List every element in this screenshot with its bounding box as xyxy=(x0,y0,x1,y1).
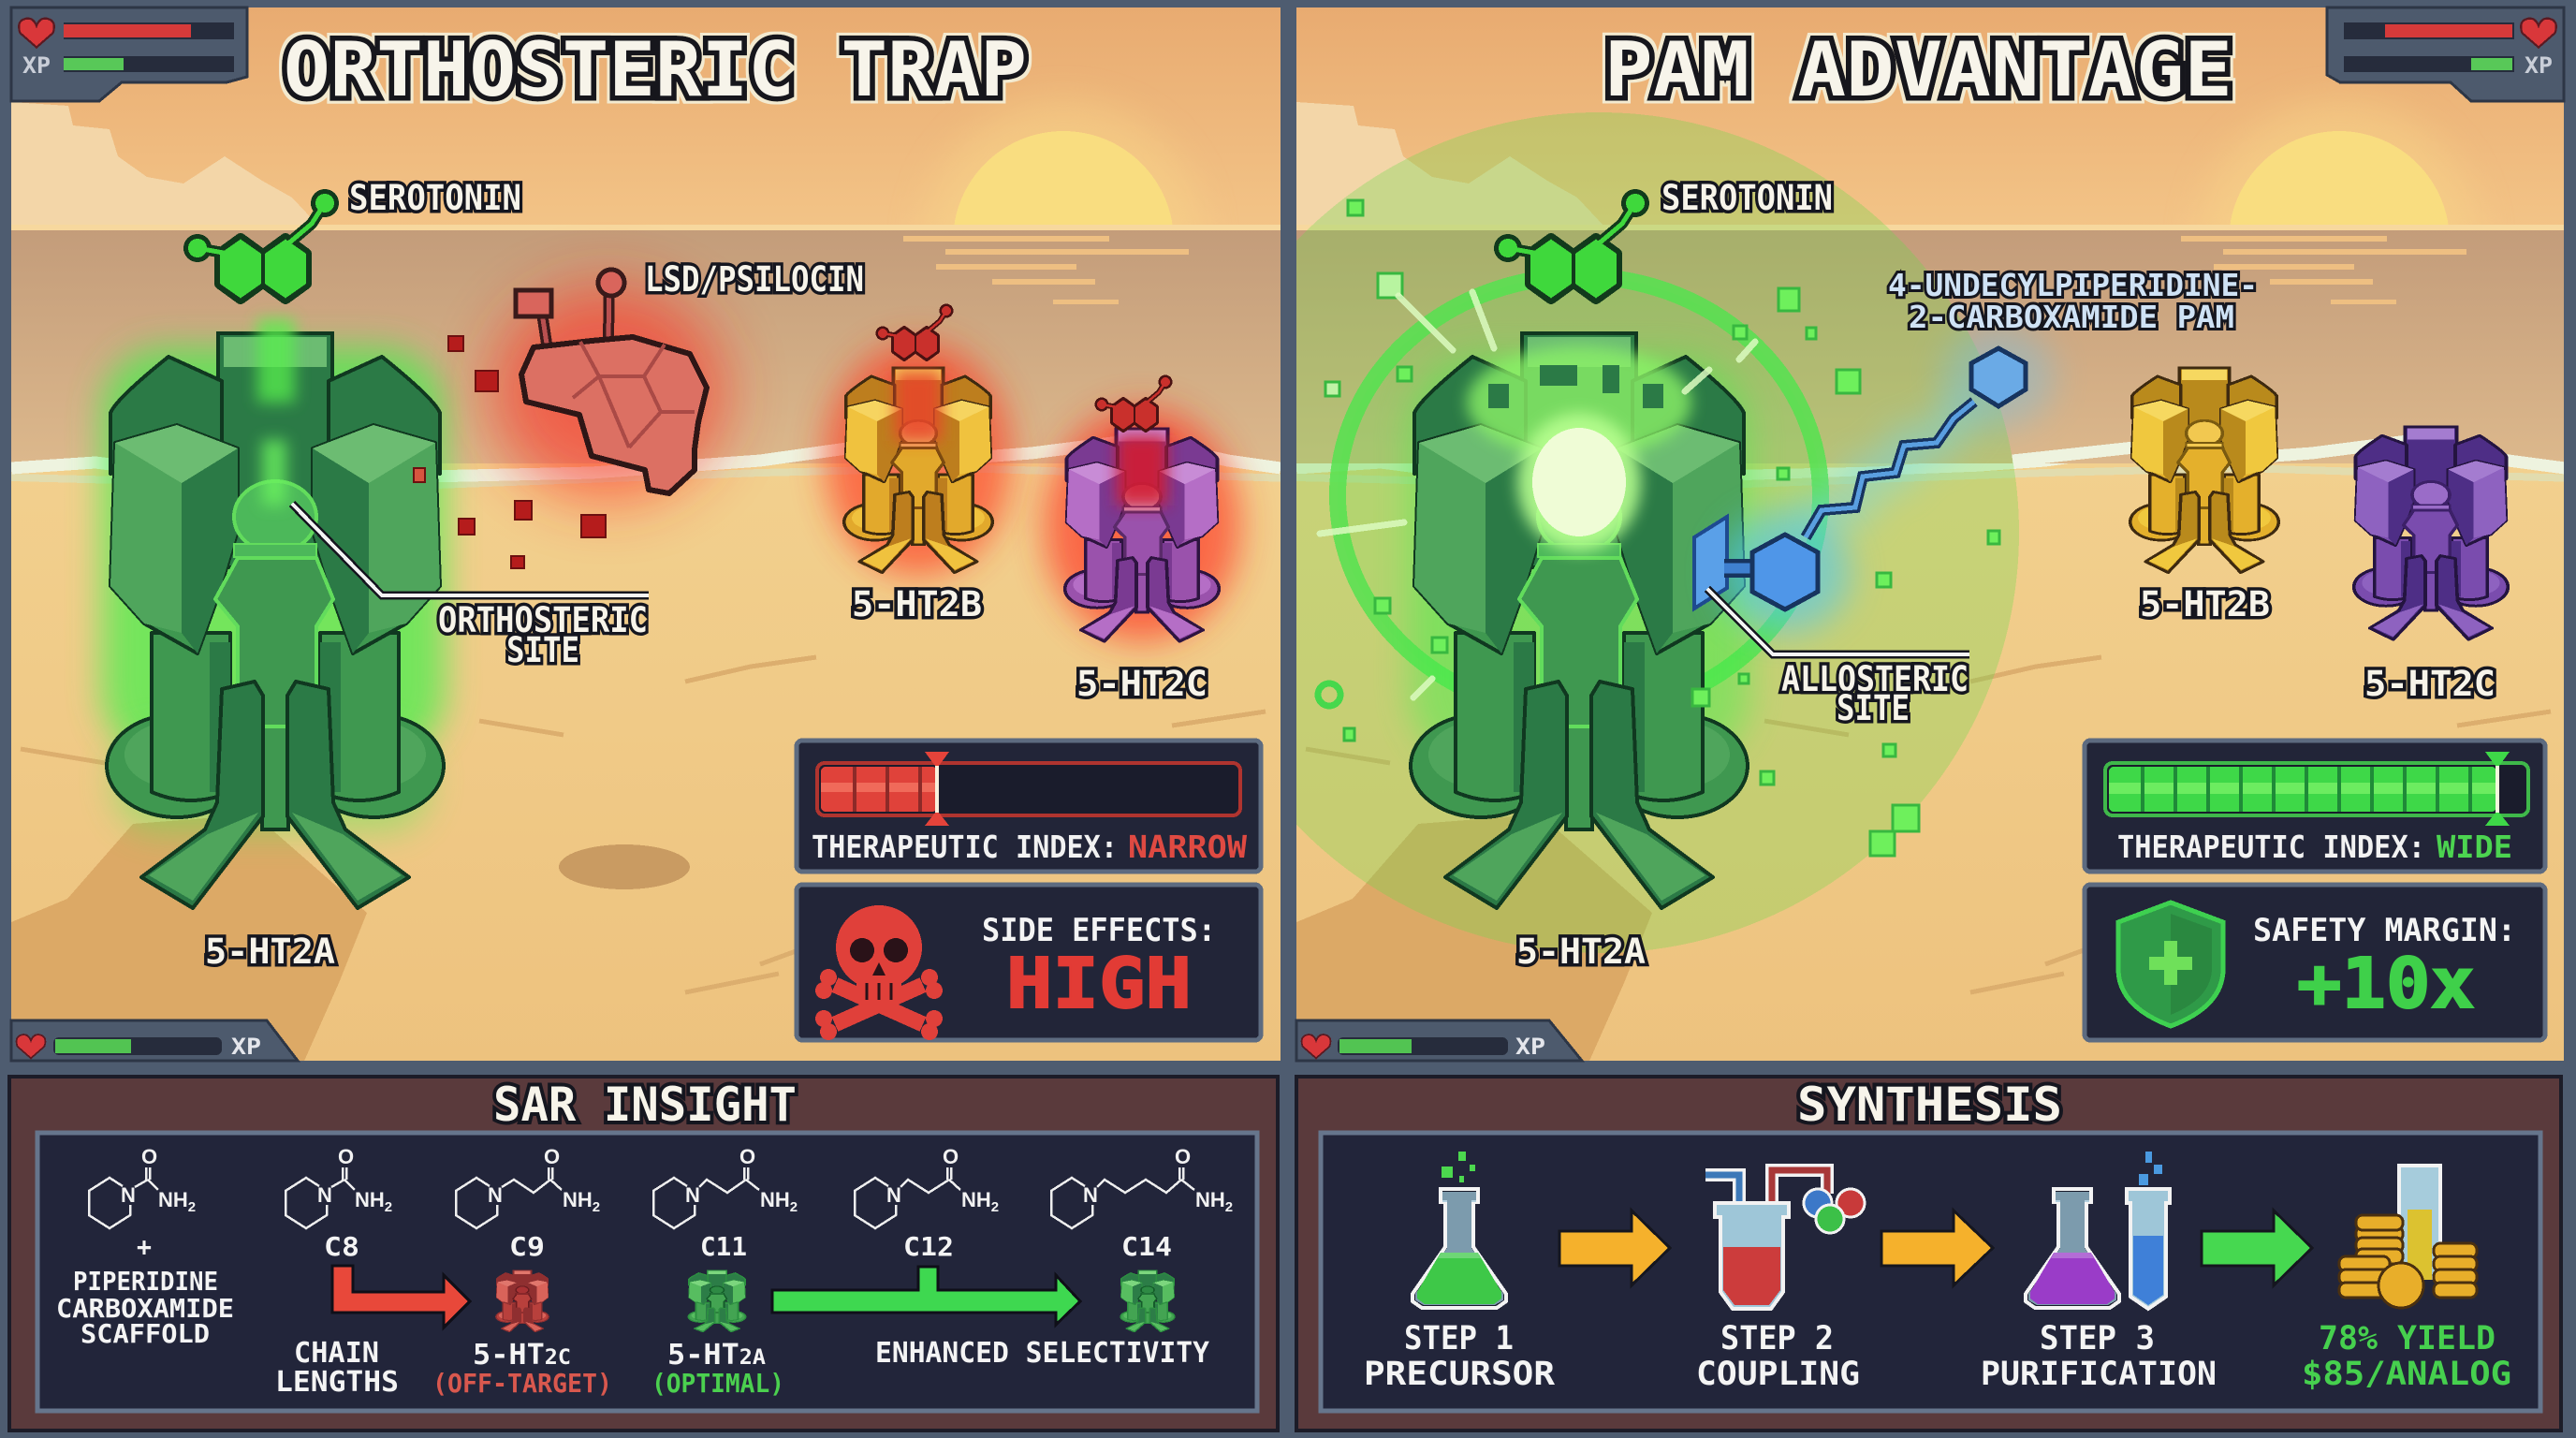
icon: skull and crossbones xyxy=(815,905,943,1040)
chain length labels xyxy=(137,1231,1172,1262)
text: chain lengths: CHAIN xyxy=(294,1337,379,1370)
text: 5-HT2A optimal xyxy=(651,1339,784,1399)
arrow: step 1 to 2 xyxy=(1559,1211,1670,1285)
serotonin label: SEROTONIN xyxy=(1661,178,1833,218)
text: chain lengths xyxy=(275,1337,399,1399)
molecule: C14: O xyxy=(1175,1145,1191,1168)
PAM label xyxy=(1888,267,2258,335)
scene background: beach sunset xyxy=(11,0,1322,1067)
title: PAM advantage: PAM ADVANTAGE xyxy=(1604,26,2232,113)
chain length labels: C9 xyxy=(509,1231,545,1262)
red particles xyxy=(414,336,606,568)
HUD: bottom stats: XP xyxy=(1515,1034,1545,1060)
serotonin molecule xyxy=(1500,195,1644,299)
molecule: C11: O xyxy=(739,1145,755,1168)
callout: allosteric site xyxy=(1707,589,1969,728)
heading: synthesis: SYNTHESIS xyxy=(1797,1078,2062,1132)
molecule: C11: 2 xyxy=(790,1199,798,1215)
HUD: top right stats: XP xyxy=(2525,52,2553,79)
label: 5-HT2C: 5-HT2C xyxy=(2364,664,2496,704)
safety margin box: +10x xyxy=(2297,944,2475,1024)
text: chain lengths: LENGTHS xyxy=(275,1366,399,1399)
safety margin box xyxy=(2085,885,2545,1040)
HUD: top left stats: XP xyxy=(22,52,51,79)
HUD: bottom left stats: XP xyxy=(231,1034,261,1060)
chain length labels: C11 xyxy=(700,1231,747,1262)
molecule: C14: 2 xyxy=(1225,1199,1233,1215)
PAM label: 2-CARBOXAMIDE PAM xyxy=(1909,299,2234,335)
therapeutic index gauge: wide xyxy=(2085,741,2545,872)
callout: orthosteric site: ORTHOSTERIC xyxy=(438,600,648,640)
text: step 2: STEP 2 xyxy=(1720,1320,1834,1357)
label: 5-HT2A: 5-HT2A xyxy=(1516,932,1646,972)
receptor: 5-HT2C purple xyxy=(2354,427,2508,639)
scene background: beach sunset xyxy=(1296,0,2576,1067)
molecule: C9 xyxy=(456,1145,600,1228)
molecule: C12 xyxy=(855,1145,999,1228)
molecule: C14: NH xyxy=(1195,1188,1225,1211)
HUD: top right stats xyxy=(2327,7,2564,101)
text: 5-HT2A optimal: (OPTIMAL) xyxy=(651,1368,784,1399)
molecule: scaffold: O xyxy=(141,1145,157,1168)
HUD: bottom left stats xyxy=(11,1020,298,1061)
text: step 1: STEP 1 xyxy=(1404,1320,1514,1357)
callout: allosteric site: ALLOSTERIC xyxy=(1781,659,1969,699)
molecule: C11: NH xyxy=(760,1188,790,1211)
text: step 2 xyxy=(1696,1320,1860,1393)
molecule: C14: N xyxy=(1083,1183,1098,1207)
title: orthosteric trap: ORTHOSTERIC TRAP xyxy=(284,26,1027,113)
molecule: scaffold xyxy=(89,1145,196,1228)
molecule: C11: N xyxy=(685,1183,700,1207)
molecule: C12: 2 xyxy=(991,1199,999,1215)
icon: yield tube and coins xyxy=(2339,1166,2477,1308)
text: yield and cost: $85/ANALOG xyxy=(2302,1356,2511,1393)
therapeutic index gauge: narrow xyxy=(797,741,1261,872)
panel: PAM advantage xyxy=(1295,6,2565,1062)
molecule: scaffold: NH xyxy=(158,1188,188,1211)
text: step 1 xyxy=(1364,1320,1556,1393)
energy particles xyxy=(1318,200,1999,856)
label: 5-HT2C: 5-HT2C xyxy=(1076,664,1208,704)
side effects box: SIDE EFFECTS: xyxy=(982,912,1216,949)
molecule: scaffold: 2 xyxy=(188,1199,196,1215)
receptor: 5-HT2C purple xyxy=(1044,378,1240,641)
icon: 5-HT2C off-target receptor xyxy=(496,1270,549,1332)
chain length labels: C8 xyxy=(324,1231,359,1262)
molecule: C8: NH xyxy=(355,1188,385,1211)
safety margin box: SAFETY MARGIN: xyxy=(2253,912,2516,949)
text: step 3: STEP 3 xyxy=(2040,1320,2155,1357)
chain length labels: C14 xyxy=(1121,1231,1172,1262)
icon: shield xyxy=(2118,902,2223,1026)
text: enhanced selectivity: ENHANCED SELECTIVITY xyxy=(875,1337,1209,1370)
text: step 3 xyxy=(1981,1320,2217,1393)
serotonin molecule xyxy=(189,195,333,299)
PAM label: 4-UNDECYLPIPERIDINE- xyxy=(1888,267,2258,303)
therapeutic index gauge: narrow: THERAPEUTIC INDEX: xyxy=(812,829,1118,865)
PAM molecule xyxy=(1694,325,2055,633)
icon: 5-HT2A optimal receptor xyxy=(688,1270,746,1332)
callout: allosteric site: SITE xyxy=(1837,688,1910,728)
icon: purification flask and tube xyxy=(2026,1152,2170,1309)
molecule: C8: 2 xyxy=(385,1199,392,1215)
LSD/psilocin molecule xyxy=(491,270,725,501)
label: 5-HT2B: 5-HT2B xyxy=(2140,584,2270,624)
callout: orthosteric site xyxy=(292,504,649,670)
icon: coupling reactor xyxy=(1705,1170,1865,1309)
therapeutic index gauge: wide: THERAPEUTIC INDEX: xyxy=(2117,829,2425,865)
molecule: C8: N xyxy=(317,1183,332,1207)
panel: orthosteric trap xyxy=(11,0,1322,1067)
molecule: C12: O xyxy=(943,1145,959,1168)
energy rays xyxy=(1320,292,1755,697)
therapeutic index gauge: narrow: NARROW xyxy=(1128,829,1247,865)
panel: SAR insight xyxy=(9,1077,1278,1431)
text: step 1: PRECURSOR xyxy=(1364,1356,1556,1393)
molecule: C9: NH xyxy=(563,1188,593,1211)
main receptor: 5-HT2A green with glow xyxy=(101,318,446,908)
label: 5-HT2B: 5-HT2B xyxy=(852,584,982,624)
arrow: step 3 to yield xyxy=(2202,1211,2312,1285)
text: piperidine carboxamide scaffold: PIPERIDINE xyxy=(73,1266,218,1297)
molecule: C14 xyxy=(1051,1145,1233,1228)
receptor: 5-HT2B yellow xyxy=(2130,368,2278,573)
molecule: C9: O xyxy=(544,1145,560,1168)
HUD: top left stats xyxy=(11,7,247,101)
text: yield and cost xyxy=(2302,1320,2511,1393)
molecule: C12: NH xyxy=(961,1188,991,1211)
text: 5-HT2C off-target xyxy=(432,1339,612,1399)
molecule: scaffold: N xyxy=(121,1183,136,1207)
LSD/psilocin label: LSD/PSILOCIN xyxy=(645,259,864,300)
text: yield and cost: 78% YIELD xyxy=(2319,1320,2496,1357)
text: step 3: PURIFICATION xyxy=(1981,1356,2217,1393)
HUD: bottom stats xyxy=(1296,1020,1582,1061)
label: 5-HT2A: 5-HT2A xyxy=(205,932,335,972)
heading: SAR insight: SAR INSIGHT xyxy=(493,1078,797,1132)
serotonin label: SEROTONIN xyxy=(349,178,521,218)
receptor: 5-HT2B yellow xyxy=(825,307,1012,576)
icon: selective receptor xyxy=(1120,1270,1175,1332)
text: 5-HT2C off-target: 5-HT2C xyxy=(473,1339,571,1372)
chain length labels: C12 xyxy=(903,1231,954,1262)
side effects box: HIGH xyxy=(1006,944,1192,1024)
text: step 2: COUPLING xyxy=(1696,1356,1860,1393)
text: piperidine carboxamide scaffold xyxy=(56,1266,234,1349)
chain length labels: + xyxy=(137,1231,152,1262)
arrow: red off-target xyxy=(332,1266,470,1328)
arrow: green enhanced selectivity xyxy=(772,1267,1080,1325)
side effects box xyxy=(797,885,1261,1040)
text: 5-HT2A optimal: 5-HT2A xyxy=(667,1339,766,1372)
text: 5-HT2C off-target: (OFF-TARGET) xyxy=(432,1368,612,1399)
callout: orthosteric site: SITE xyxy=(506,630,579,670)
panel: synthesis xyxy=(1296,1077,2561,1431)
molecule: C11 xyxy=(653,1145,798,1228)
molecule: C8: O xyxy=(338,1145,354,1168)
text: piperidine carboxamide scaffold: SCAFFOLD xyxy=(80,1318,210,1349)
icon: precursor flask xyxy=(1412,1152,1506,1308)
molecule: C9: N xyxy=(488,1183,503,1207)
molecule: C12: N xyxy=(886,1183,901,1207)
molecule: C9: 2 xyxy=(593,1199,600,1215)
main receptor: 5-HT2A activated xyxy=(1411,333,1748,908)
arrow: step 2 to 3 xyxy=(1881,1211,1993,1285)
molecule: C8 xyxy=(285,1145,392,1228)
green energy rings xyxy=(1296,112,2019,953)
text: piperidine carboxamide scaffold: CARBOXAMIDE xyxy=(56,1293,234,1324)
therapeutic index gauge: wide: WIDE xyxy=(2437,829,2512,865)
